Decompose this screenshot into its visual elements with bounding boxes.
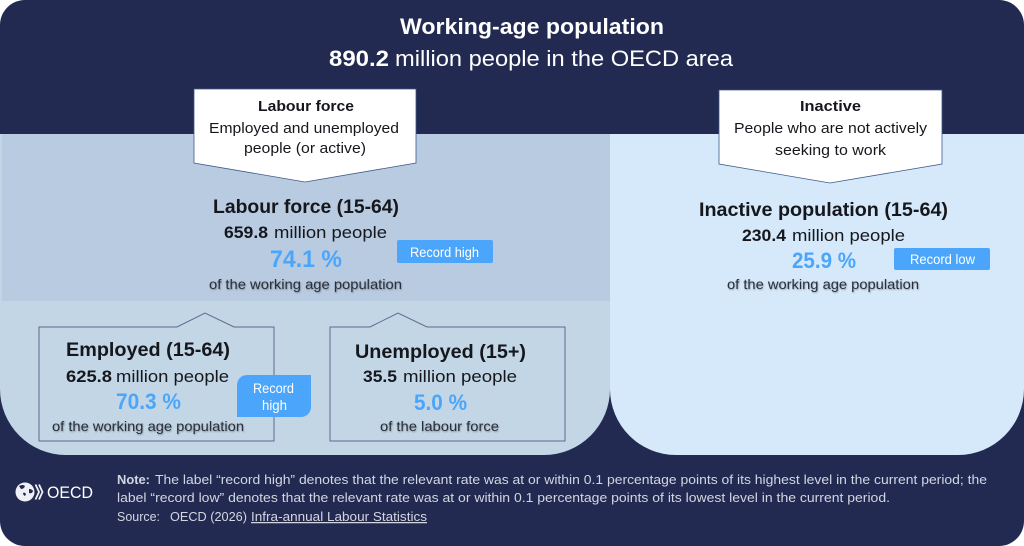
text block: inactive figures [699,199,948,292]
text block: inactive figures: 25.9 % [792,248,856,273]
box: unemployed: Unemployed (15+) [355,341,526,363]
box: unemployed: million people [403,367,517,386]
badge: record low [894,248,990,270]
panel: labour force background [0,134,610,455]
text block: inactive figures: of the working age population [727,276,919,292]
callout: inactive: seeking to work [775,142,887,159]
title [329,14,734,71]
badge: record high, labour force: Record high [410,245,479,260]
box: unemployed [330,313,565,441]
callout: inactive: Inactive [800,98,861,115]
note text: label “record low” denotes that the relevant rate was at or within 0.1 percentage points of its lowest level in the current period. [117,491,890,505]
callout: inactive: People who are not actively [734,120,928,137]
text block: labour force figures: of the working age population [209,276,402,292]
callout: inactive [719,90,942,183]
text block: labour force figures: 659.8 [224,223,268,242]
text block: labour force figures [209,196,402,292]
badge: record low: Record low [910,252,975,267]
text block: inactive figures: million people [792,226,905,245]
box: unemployed: 5.0 % [414,390,467,415]
callout: labour force: people (or active) [244,140,366,157]
badge: record high, employed: Record [253,381,294,396]
panel: inactive background [600,134,1024,455]
box: employed: 70.3 % [116,389,181,414]
box: unemployed: 35.5 [363,367,397,386]
box: employed: of the working age population [52,418,244,434]
badge: record high, labour force [397,240,493,263]
note text: Note: [117,473,150,487]
source line: Source: [117,510,160,524]
box: employed [39,313,274,441]
text block: inactive figures: 230.4 [742,226,787,245]
callout: labour force: Labour force [258,98,354,115]
box: unemployed: of the labour force [380,418,499,434]
source line: Infra-annual Labour Statistics [251,510,427,524]
text block: labour force figures: 74.1 % [270,246,342,273]
logo: OECD [16,482,93,502]
note text: The label “record high” denotes that the relevant rate was at or within 0.1 percentage points of its highest level in the current period; the [155,473,987,487]
text block: inactive figures: Inactive population (15-64) [699,199,948,221]
box: employed: million people [116,367,229,386]
text block: labour force figures: Labour force (15-64) [213,196,399,218]
title: 890.2 [329,46,389,71]
source line: OECD (2026) [170,510,247,524]
note text [117,473,987,505]
title: million people in the OECD area [395,46,734,71]
box: employed: Employed (15-64) [66,339,230,361]
title: Working-age population [400,14,664,39]
panel: labour force upper band [2,134,610,301]
badge: record high, employed: high [262,398,287,413]
callout: labour force [194,89,416,182]
box: employed: 625.8 [66,367,112,386]
source line [117,510,427,524]
badge: record high, employed [237,375,311,417]
logo: OECD: OECD [47,484,93,502]
text block: labour force figures: million people [274,223,387,242]
callout: labour force: Employed and unemployed [209,120,399,137]
